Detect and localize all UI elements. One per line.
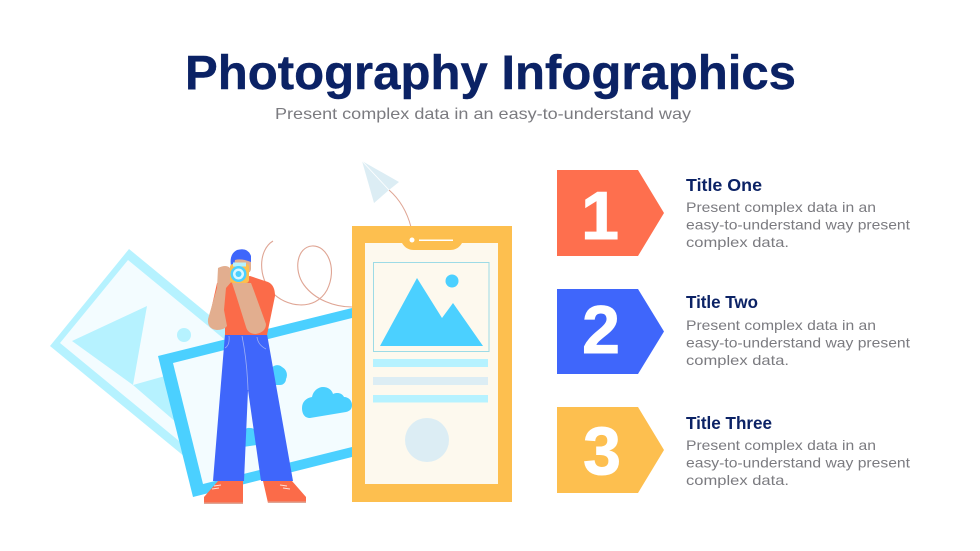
- illustration: blue tilted photo: [158, 308, 352, 497]
- text bars: [373, 359, 488, 402]
- title: Photography Infographics: [185, 47, 796, 100]
- step 3 badge: [557, 407, 664, 493]
- phone button: [405, 418, 449, 462]
- step 3 text: complex data.: [686, 472, 789, 488]
- plane trail: [389, 190, 411, 227]
- step 1 text: [686, 175, 910, 250]
- step 1 badge: 1: [581, 178, 619, 254]
- step 2 text: Present complex data in an: [686, 317, 876, 333]
- illustration: light tilted photo: [50, 249, 264, 457]
- step 3 badge: 3: [583, 413, 621, 489]
- step 3 text: [686, 413, 910, 488]
- step 1 text: Present complex data in an: [686, 199, 876, 215]
- step 1 badge: [557, 170, 664, 256]
- phone photo: [374, 262, 489, 352]
- hair: [231, 249, 251, 266]
- step 2 badge: 2: [582, 292, 620, 368]
- phone: [352, 226, 512, 502]
- step 2 text: easy-to-understand way present: [686, 334, 910, 350]
- icon: cloud: [302, 387, 352, 418]
- left arm: [208, 266, 233, 330]
- step 3 text: Present complex data in an: [686, 437, 876, 453]
- shoes: [204, 481, 306, 504]
- shirt: [211, 276, 275, 335]
- person photographer: [204, 249, 306, 504]
- string curve: [262, 241, 352, 307]
- step 1 text: Title One: [686, 175, 762, 195]
- step 2 text: complex data.: [686, 352, 789, 368]
- step 3 text: easy-to-understand way present: [686, 454, 910, 470]
- step 1 text: complex data.: [686, 234, 789, 250]
- step 2 badge: [557, 289, 664, 374]
- face: [232, 258, 251, 273]
- icon: paper plane: [362, 161, 399, 203]
- step 2 text: Title Two: [686, 292, 758, 312]
- subtitle: Present complex data in an easy-to-understand way: [275, 106, 691, 123]
- step 2 text: [686, 292, 910, 368]
- trousers: [213, 334, 293, 481]
- step 1 text: easy-to-understand way present: [686, 216, 910, 232]
- icon: camera: [230, 262, 249, 283]
- right arm: [232, 283, 266, 334]
- step 3 text: Title Three: [686, 413, 772, 433]
